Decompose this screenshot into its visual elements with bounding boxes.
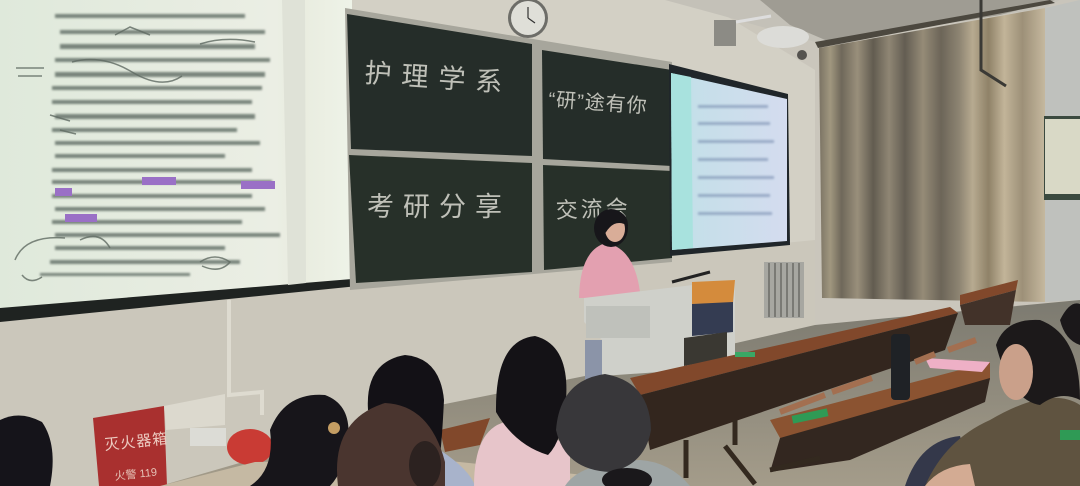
pink notebook bbox=[925, 358, 990, 372]
radiator bbox=[764, 262, 804, 318]
green desk cards bbox=[792, 408, 828, 424]
audience student short hair bbox=[556, 374, 690, 486]
pipe on wall bbox=[229, 300, 262, 415]
right projection screen bbox=[669, 64, 790, 256]
audience far right head bbox=[1060, 303, 1080, 345]
fire alarm label: 火警 119 bbox=[114, 465, 158, 483]
blackboard title line 2: “研”途有你 bbox=[548, 88, 648, 118]
blackboard title line 1: 护理学系 bbox=[364, 58, 513, 98]
green card far right bbox=[1060, 430, 1080, 440]
foreground desk bbox=[160, 460, 690, 486]
ceiling shadow bbox=[760, 0, 1055, 42]
ceiling bbox=[665, 0, 1060, 42]
wall clock bbox=[508, 0, 548, 38]
upper wall bbox=[350, 0, 815, 300]
audience student with glasses bbox=[368, 355, 475, 486]
audience left edge bbox=[0, 415, 53, 486]
red bag by wall bbox=[227, 429, 273, 465]
left projection screen bbox=[0, 0, 368, 322]
handwritten annotations bbox=[15, 27, 255, 281]
blackboard subtitle line 2: 交流会 bbox=[555, 195, 631, 223]
cabinet label: 灭火器箱 bbox=[104, 430, 169, 454]
right wall and poster bbox=[1044, 0, 1080, 302]
purple highlights bbox=[55, 177, 275, 222]
projected document text bbox=[40, 14, 280, 276]
audience student with bun bbox=[337, 403, 445, 486]
lower wall bbox=[0, 240, 815, 486]
audience student with clip bbox=[250, 395, 349, 486]
speaker bbox=[579, 209, 640, 385]
blackboard subtitle line 1: 考研分享 bbox=[367, 192, 511, 222]
chair backs bbox=[780, 340, 976, 412]
curtains bbox=[815, 0, 1055, 302]
podium bbox=[584, 272, 735, 376]
blackboards bbox=[345, 8, 672, 290]
audience student right foreground bbox=[905, 320, 1080, 486]
desk rows bbox=[440, 280, 1018, 484]
wall socket bbox=[190, 428, 226, 446]
water bottle bbox=[891, 334, 910, 400]
ceiling projector bbox=[714, 16, 809, 60]
audience student in pink bbox=[474, 336, 570, 486]
fire extinguisher cabinet bbox=[93, 394, 225, 486]
floor bbox=[160, 300, 1080, 486]
